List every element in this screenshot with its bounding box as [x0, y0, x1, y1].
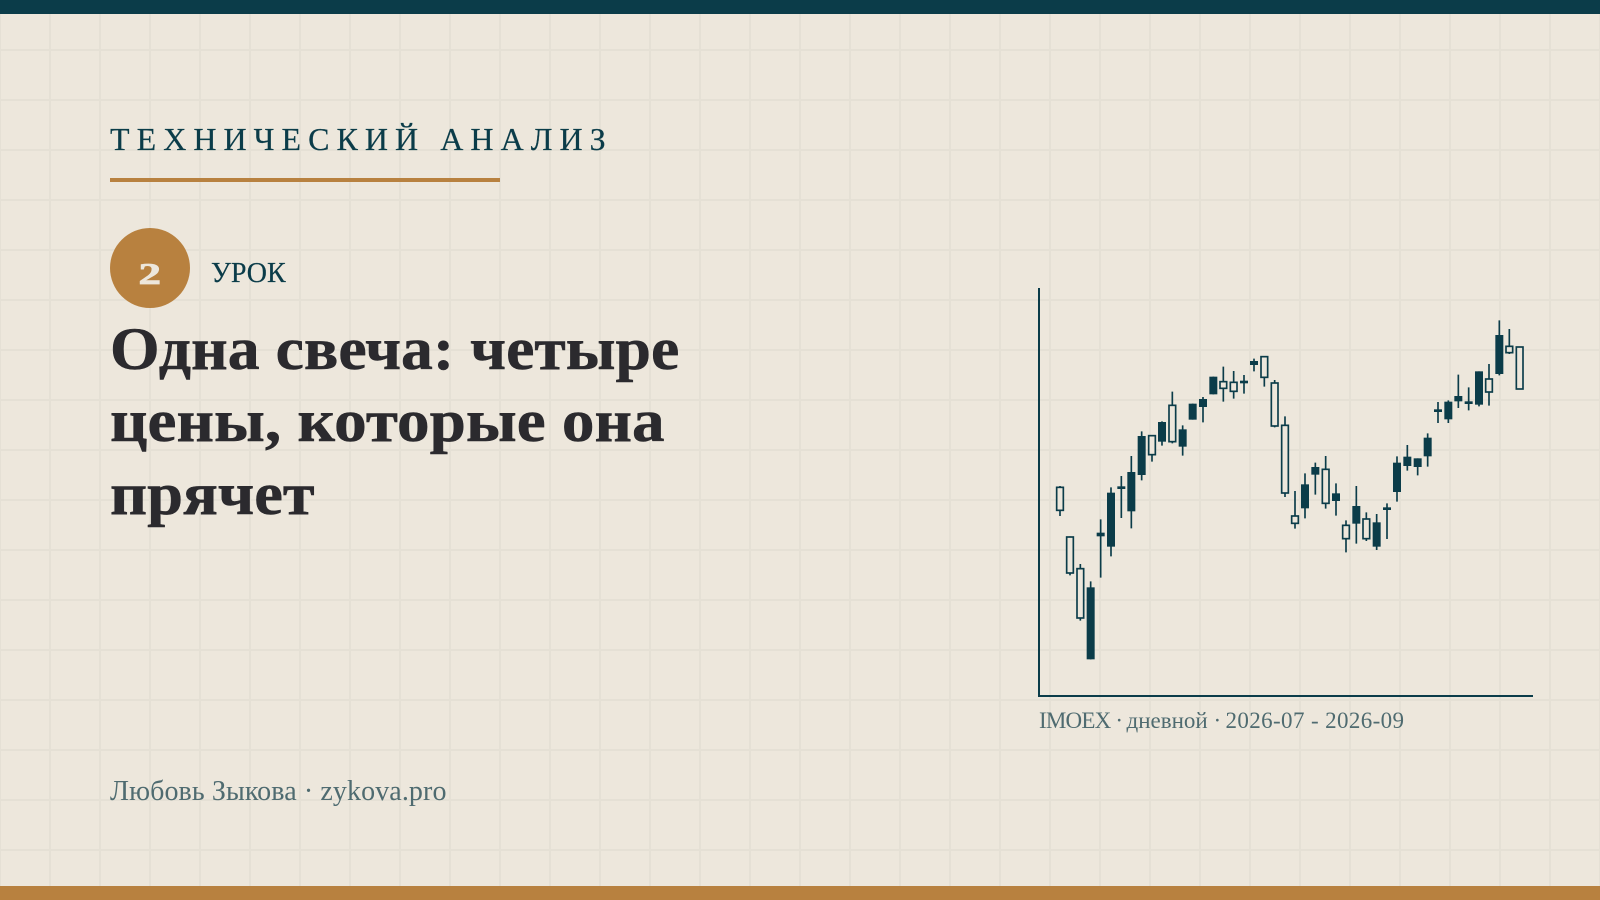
main title: Одна свеча: четыре [110, 316, 679, 382]
lesson number badge [110, 228, 190, 308]
chart caption: 2026-07 - 2026-09 [1226, 708, 1404, 733]
chart axes [1039, 288, 1533, 696]
bottom bar [0, 886, 1600, 900]
candles: second half [1292, 320, 1523, 552]
candles: first half [1057, 356, 1288, 659]
lesson number badge: 2 [139, 256, 161, 291]
accent underline [110, 178, 500, 182]
main title: цены, которые она [110, 388, 665, 454]
main title [110, 316, 679, 528]
chart caption: IMOEX · [1039, 708, 1122, 733]
main title: прячет [110, 460, 315, 526]
top bar [0, 0, 1600, 14]
chart caption: дневной · [1126, 708, 1221, 733]
author line: Любовь Зыкова · zykova.pro [110, 776, 447, 807]
chart caption [1039, 708, 1404, 733]
lesson label: УРОК [211, 258, 286, 289]
eyebrow heading: ТЕХНИЧЕСКИЙ АНАЛИЗ [110, 121, 613, 157]
